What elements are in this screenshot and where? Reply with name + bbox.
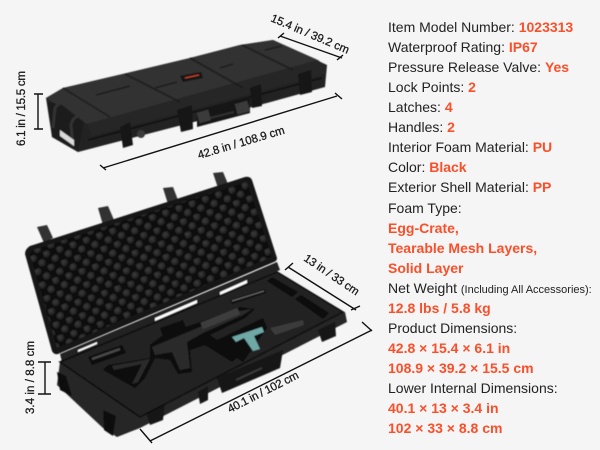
dimension: interior length <box>140 322 372 443</box>
end handle <box>48 102 84 152</box>
net weight value: 12.8 lbs / 5.8 kg <box>388 300 491 316</box>
scope <box>88 345 126 365</box>
foam type value 3: Solid Layer <box>388 260 464 276</box>
latches <box>120 122 133 148</box>
closed case illustration <box>46 40 327 152</box>
spec: product dimensions: Product Dimensions: <box>388 320 517 336</box>
base latches <box>57 372 72 396</box>
spec: shell material: Exterior Shell Material: PP <box>388 179 551 195</box>
spec: model number: Item Model Number: 1023313 <box>388 19 573 35</box>
hinge strip <box>60 262 280 362</box>
gap highlights <box>78 342 97 352</box>
spec: waterproof: Waterproof Rating: IP67 <box>388 39 538 55</box>
spec: net weight: Net Weight (Including All Accessories): <box>388 280 592 296</box>
lid ribs <box>63 45 293 117</box>
text: interior length label: 40.1 in / 102 cm <box>226 370 301 416</box>
product dimensions inches: 42.8 × 15.4 × 6.1 in <box>388 340 510 356</box>
foam type value 1: Egg-Crate, <box>388 220 459 236</box>
top rail <box>230 289 266 304</box>
text: interior width label: 13 in / 33 cm <box>301 253 361 298</box>
product dimensions cm: 108.9 × 39.2 × 15.5 cm <box>388 360 534 376</box>
case lid top <box>46 40 318 124</box>
text: interior height label: 3.4 in / 8.8 cm <box>25 341 37 414</box>
rifle <box>152 309 252 370</box>
lid frame <box>25 177 277 354</box>
dimension: case width <box>269 13 351 60</box>
text: width label: 15.4 in / 39.2 cm <box>269 13 351 57</box>
spec: color: Color: Black <box>388 159 467 175</box>
dimension: case height <box>16 71 43 146</box>
base body <box>57 312 347 437</box>
dimension: interior width <box>285 253 361 310</box>
seam <box>88 78 322 140</box>
pistol cutout <box>213 318 267 362</box>
magazines right <box>267 277 298 297</box>
spec: internal dimensions: Lower Internal Dimensions: <box>388 380 558 396</box>
dimension: interior height <box>25 341 51 414</box>
dimension: case length <box>100 93 342 170</box>
spec: handles: Handles: 2 <box>388 119 455 135</box>
base foam <box>60 272 343 417</box>
magazine <box>270 320 304 335</box>
pressure valve <box>137 130 145 138</box>
specification list <box>388 19 592 436</box>
spec: lock points: Lock Points: 2 <box>388 79 476 95</box>
spec: foam type: Foam Type: <box>388 200 462 216</box>
front handle <box>197 97 250 127</box>
text: height label: 6.1 in / 15.5 cm <box>16 71 28 146</box>
spec: foam material: Interior Foam Material: PU <box>388 139 552 155</box>
spec: valve: Pressure Release Valve: Yes <box>388 59 569 75</box>
text: length label: 42.8 in / 108.9 cm <box>196 125 286 162</box>
open case illustration <box>25 172 347 437</box>
spec: latches: Latches: 4 <box>388 99 453 115</box>
internal dimensions inches: 40.1 × 13 × 3.4 in <box>388 400 499 416</box>
pistol <box>232 327 264 351</box>
foam type value 2: Tearable Mesh Layers, <box>388 240 537 256</box>
internal dimensions cm: 102 × 33 × 8.8 cm <box>388 420 502 436</box>
case body <box>46 40 327 152</box>
brand label <box>180 72 203 82</box>
lid side band <box>87 60 325 136</box>
lid latches <box>37 225 53 243</box>
rifle cutout <box>103 307 255 388</box>
egg crate foam <box>30 182 272 348</box>
rail cutout <box>160 320 186 336</box>
